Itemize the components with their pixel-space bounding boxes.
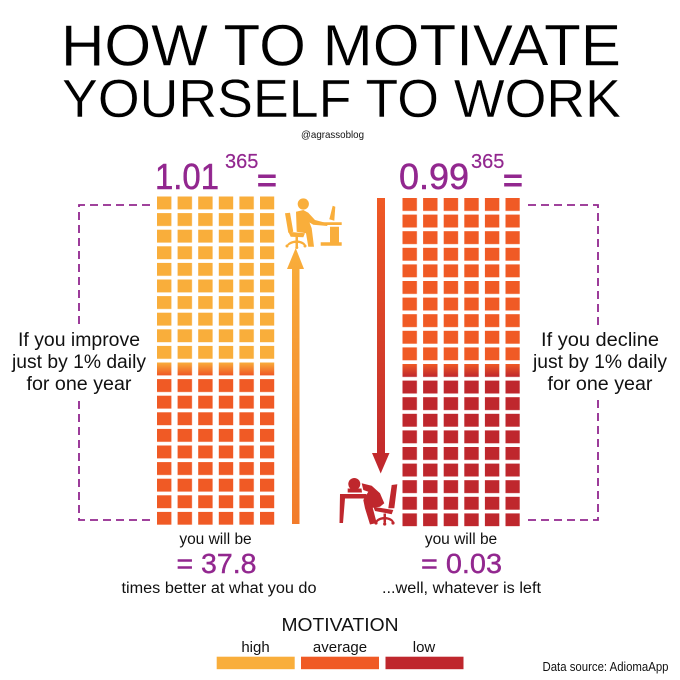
label: decline: for one year [548,374,653,395]
legend: motivation: low [413,639,435,656]
legend: motivation: MOTIVATION [282,615,398,635]
formula: improve: 365 [225,151,258,173]
legend: motivation [217,615,464,669]
result: improve: times better at what you do [122,580,316,597]
result: decline [382,531,542,597]
label: improve: If you improve [18,330,140,351]
icon: motivated worker at desk [285,198,342,249]
formula: improve [155,151,277,200]
result: improve: you will be [179,531,252,548]
author handle: @agrassoblog [301,129,364,141]
result: improve [122,531,316,597]
formula: decline: 0.99 [399,156,469,197]
title: YOURSELF TO WORK [62,69,621,129]
result: decline: = 0.03 [421,548,502,579]
arrow: down [372,198,390,474]
bracket: decline [528,205,598,520]
formula: decline [399,151,523,200]
square grid: improve [157,196,274,525]
formula: improve: 1.01 [155,156,219,197]
square grid: decline [402,198,520,526]
result: decline: you will be [425,531,497,548]
result: decline: ...well, whatever is left [382,580,542,597]
label: improve: just by 1% daily [11,352,146,373]
title: HOW TO MOTIVATE [61,14,621,78]
label: improve [11,330,146,395]
label: decline: If you decline [541,330,659,351]
title [61,14,621,129]
legend: motivation: average [313,639,367,656]
label: decline [532,330,667,395]
data source: Data source: AdiomaApp [542,660,669,674]
arrow: up [287,248,304,524]
label: improve: for one year [26,374,132,395]
formula: improve: = [257,162,277,200]
bracket: improve [79,205,150,520]
label: decline: just by 1% daily [532,352,667,373]
formula: decline: = [503,162,523,200]
legend: motivation: high [241,639,270,656]
icon: exhausted worker at desk [340,478,397,526]
result: improve: = 37.8 [176,548,256,579]
formula: decline: 365 [471,151,504,173]
